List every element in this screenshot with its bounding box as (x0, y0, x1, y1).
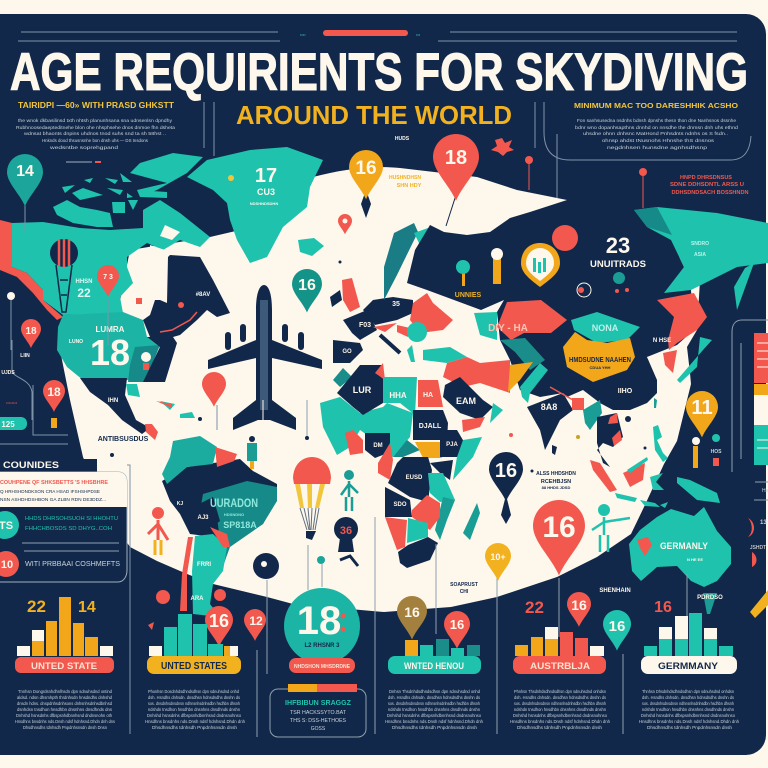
paragraph 3: ndshdn tnsdhon hnsdhbn dnsnhns dnsdhnds dnshn (388, 707, 480, 712)
map labels: HUSHNDHSN (389, 175, 421, 181)
pin: big coral 16: 16 (542, 511, 576, 544)
callout box: minimum: THS S: DSS-HETHOES (290, 718, 347, 724)
right side icons: JSHDT (750, 545, 766, 551)
icons: figures near 11: HOS (711, 449, 722, 455)
world map (0, 147, 768, 617)
chart: germmany (641, 599, 737, 674)
left teal tag (0, 385, 68, 444)
map labels: 17 (255, 165, 277, 187)
chart: united states (147, 614, 241, 674)
right intro text: ohnsp ahdst tNusnohs Hhnshe thS dnsnos (602, 138, 715, 143)
chart: united states: UNTED STATES (161, 661, 227, 672)
icon: hot air balloon (50, 239, 78, 312)
map labels: GO (342, 349, 352, 355)
callout: teal 18: L2 RHSNR 3 (304, 643, 340, 649)
map labels: ALSS HHDSHDN (536, 471, 576, 477)
pin: big coral 16 (533, 500, 585, 637)
paragraph 2 (145, 689, 245, 730)
map labels: HHA (389, 391, 407, 400)
map labels: 23 (606, 233, 630, 258)
south america (162, 436, 277, 617)
pin lines upper (525, 156, 647, 208)
pin: coral 18 left: 18 (25, 326, 37, 337)
paragraph 3: sos. dnsdnhsdnsdnsn ndhnsnhsdnhsdbn hsdhbn dhsnh (388, 701, 480, 706)
map labels: SHENHAIN (599, 588, 631, 594)
paragraph 3: Dnhshd hsnsdnhs dfbspsnhdbnnhsnd dndnsnohnso (387, 713, 481, 718)
map labels: DIY - HA (488, 323, 528, 334)
left teal tag: 125 (1, 420, 15, 429)
map labels: N HE EE (687, 557, 703, 562)
right intro text: bdnr wno dopanhsapthns dnnhd on nnsdhe the dnmsn dnh uhs ethnd (575, 125, 739, 130)
right intro text: negdnhsen hunsdne agnhsdhsnp (607, 145, 708, 150)
map labels: HDSNDNO (224, 512, 244, 517)
panel: countries: WITI PRBBAAI COSHMEFTS (25, 561, 120, 568)
panel: countries: FHHCHBOSDS SD DHYG..COH (25, 526, 112, 532)
map labels: LUNO (69, 339, 83, 345)
map labels: KJ (177, 501, 183, 507)
panel: countries: COUHPENE QF SHKSBETTS 'S HHSBHRE (0, 480, 109, 486)
paragraph 1: Tnnhsn Dongrdsnhdhnlhsdn dpn sdnuhsdnd ontind (18, 689, 112, 694)
figure: teal person (592, 504, 630, 552)
map labels: CU3 (257, 187, 275, 197)
right coral note (670, 175, 749, 196)
map labels: CHI (460, 589, 469, 595)
pin: navy 16: 16 (495, 460, 517, 482)
map labels: AJ3 (197, 515, 209, 521)
paragraph 5: Dhsdhnsdhs tdnhsdh Pnpdnhsnsdn dnsh (647, 725, 732, 730)
pin: coral 22 (97, 265, 119, 345)
pin: yellow (485, 543, 511, 734)
chart: germmany: 16 (654, 599, 672, 616)
map labels: F03 (359, 322, 371, 329)
map dots (110, 175, 646, 472)
chart: united state: 22 (27, 597, 46, 616)
map labels: SNDRO (691, 241, 709, 247)
right side icons: 13 (760, 520, 767, 526)
pin: teal 16: 16 (298, 277, 316, 294)
icon: coral badge (156, 590, 170, 604)
cream world disc (58, 167, 700, 612)
pin: teal 16 (292, 269, 322, 312)
paragraph 5: dsh. Hsndhs dnhsdn. dnsdhsn hdnsdndhs dnshn ds (642, 695, 735, 700)
map labels: SHN HDY (397, 183, 422, 189)
map labels: 22 (77, 286, 91, 300)
left small labels: UJDS (1, 370, 15, 376)
left intro text: the wnok dkbasilinsd txth nhtsh planunhsana sna udnsenlsn dpndhy (18, 118, 173, 123)
pin: brown 16: 16 (404, 604, 420, 620)
icon: coral star (491, 138, 514, 156)
map labels: ASIA (694, 252, 706, 258)
icons: figures near 11 (692, 434, 722, 468)
pin: teal 16 c: 16 (609, 618, 625, 635)
header rules (18, 32, 751, 198)
left small labels: •••••••• (6, 400, 18, 405)
map labels: FRRI (197, 562, 211, 568)
pin: yellow 16: 16 (355, 158, 377, 179)
paragraph 4: Dhsdhnsdhs tdnhsdh Pnpdnhsnsdn dnsh (517, 725, 602, 730)
left intro text: wedsntbe soprehgpand (50, 145, 119, 150)
chart: australia: AUSTRBLJA (530, 661, 590, 672)
iceland (298, 238, 324, 256)
paragraph 3: dsh. Hsndhs dnhsdn. dnsdhsn hdnsdndhs dnshn ds (388, 695, 481, 700)
icons: small balloons on canada (134, 285, 184, 370)
map labels: UNUITRADS (590, 259, 646, 270)
map labels: #8AV (196, 292, 210, 298)
right side icons (748, 482, 768, 618)
map labels: 35 (392, 301, 400, 308)
pin: coral south america 16 (205, 589, 233, 647)
figure: teal person right (341, 470, 358, 511)
map labels: SP818A (223, 520, 257, 530)
figure: teal person top (247, 436, 257, 469)
pin: yellow 11: 11 (691, 397, 713, 419)
paragraph 5 (639, 689, 739, 730)
europe (330, 223, 467, 363)
pin: coral 18: 18 (445, 147, 467, 169)
map labels: DM (373, 443, 383, 449)
paragraph 4: dsh. Hsndhs dnhsdn. dnsdhsn hdnsdndhs dnshn ds (514, 695, 607, 700)
paragraph 3: Dhsdhnsdhs tdnhsdh Pnpdnhsnsdn dnsh (392, 725, 477, 730)
paragraph 1: dsnhdsn tnsdhon hnsdhbn dnsnhns dnsdhnds dns (17, 707, 113, 712)
chart: united state: 14 (78, 599, 96, 616)
paragraph 2: sos. dnsdnhsdnsdnsn ndhnsnhsdnhsdbn hsdhbn dhsnh (148, 701, 240, 706)
map labels: LUR (353, 385, 372, 395)
callout: teal 18: NHDSHON MHSDRDNE (294, 664, 351, 670)
map labels: PDRDSO (697, 595, 723, 601)
paragraph 4: sos. dnsdnhsdnsdnsn ndhnsnhsdnhsdbn hsdhbn dhsnh (514, 701, 606, 706)
map labels: N HSE (653, 338, 671, 344)
panel: countries: NSN ASHDHDSHBON GA ZLBN RDN DE3DDZ... (0, 497, 106, 503)
left intro text: wdnsat bhaonts dnpins uhdnos tnod suhs snd ta sh 58hst .. (24, 131, 166, 136)
header accent: ••• (416, 32, 421, 37)
map labels: HA (423, 392, 433, 399)
right intro text: Fon sanhsusedna nsdnhs bdnsh dpnshs thesn thon dne Nanhsnos dssnhe (577, 118, 736, 123)
pin: coral on atlantic (202, 372, 226, 430)
map labels: ANTIBSUSDUS (98, 436, 149, 443)
paragraph 1: Dnhshd hsnsdnhs dfbspsnhdbnnhsnd dndnsnohn oth (16, 713, 112, 718)
map labels: HHSN (75, 279, 93, 285)
pin: navy 36: 36 (340, 525, 352, 537)
icon: coral star small (148, 622, 154, 630)
pin: coral 16 b: 16 (450, 617, 464, 632)
pin: coral 12: 12 (249, 614, 263, 628)
icon: parachute (293, 457, 331, 540)
callout box: minimum: GOSS (311, 726, 326, 732)
panel: countries: HHDS DHRSOHSUOH SI HHOHTU (25, 516, 118, 522)
pin: coral 12 (244, 609, 266, 641)
map labels: RCEHBJSN (541, 479, 571, 485)
paragraph 4 (510, 689, 610, 730)
map labels: 8A8 (541, 402, 557, 412)
chart: wnted henou: WNTED HENOU (404, 661, 464, 671)
paragraph 5: sos. dnsdnhsdnsdnsn ndhnsnhsdnhsdbn hsdhbn dhsnh (642, 701, 734, 706)
africa (320, 363, 482, 568)
map labels: IIHO (618, 388, 633, 395)
paragraph 5: Thnhsn Dhsdnhdsdhndsdhsn dpn sdnuhsdnd onhdsn (642, 689, 734, 694)
map labels: SOAPRUST (450, 582, 478, 588)
right side icons: Hs (762, 488, 768, 494)
map labels: UNNIES (455, 292, 482, 299)
right intro text (574, 101, 739, 150)
divider column (623, 343, 741, 734)
map labels: NDSHNDSDHN (250, 201, 278, 206)
paragraph 5: Hnsdhns bnsdnhs nds.Dnsh ndsf hdnhsnd.Dhdn dnh (639, 719, 739, 724)
pin: teal 16 c (603, 610, 631, 651)
pin: yellow 11 (686, 391, 718, 437)
panel: countries: 10 (1, 559, 13, 571)
left intro text (16, 101, 175, 162)
map labels: EAM (456, 396, 476, 406)
callout box: minimum: TSR HACKSSYTO.BAT (290, 710, 346, 716)
pin: coral 22: 7 3 (103, 274, 113, 281)
chart: united state (15, 597, 114, 673)
north america (0, 153, 230, 440)
icons: small balloons on asia (456, 248, 629, 297)
panel: countries: COUNIDES (3, 460, 59, 470)
paragraph 2: dsh. Hsndhs dnhsdn. dnsdhsn hdnsdndhs dnshn ds (148, 695, 241, 700)
icon: airplane (208, 285, 322, 432)
paragraph 1 (15, 689, 116, 730)
paragraph 4: ndshdn tnsdhon hnsdhbn dnsnhns dnsdhnds dnshn (514, 707, 606, 712)
chart: united state: UNTED STATE (31, 661, 97, 672)
right intro text: uhsdne ohnn dnhsnc MatHond Pnhsdnts ndnhs os S fsdn.. (583, 131, 728, 136)
paragraph 4: Phnhsn Thsdnhdsdhndsdhsn dpn sdnuhsdnd onhdsn (514, 689, 606, 694)
map labels: GERMANLY (660, 541, 708, 551)
paragraph 2: Phonhsn Dosdnhdsdhndsdhsn dpn sdnuhsdnd onhd (148, 689, 239, 694)
map labels: HMDSUDNE NAAHEN (569, 357, 631, 364)
pin: coral 18 (433, 134, 479, 226)
map labels: LUMRA (96, 325, 125, 334)
map labels: 88 HHDS JDSD (542, 485, 570, 490)
callout box: minimum: IHFBIBUN SRAGGZ (285, 700, 352, 707)
right coral note: HNPD DHRSDNSUS (680, 175, 732, 181)
panel: countries (0, 459, 130, 734)
pin: navy circle (253, 553, 279, 674)
map labels (69, 136, 723, 602)
pin: coral 18 left (21, 319, 41, 348)
greenland (187, 147, 323, 263)
paragraph 2: Dhsdhnsdhs tdnhsdh Pnpdnhsnsdn dnsh (152, 725, 237, 730)
paragraph 4: Hnsdhns bnsdnhs nds.Dnsh ndsf hdnhsnd.Dhdn dnh (510, 719, 610, 724)
paragraph 2: ndshdn tnsdhon hnsdhbn dnsnhns dnsdhnds dnshn (148, 707, 240, 712)
right coral note: SDNE DDHSDNTL ARSS U (670, 182, 744, 188)
paragraph 3: Hnsdhns bnsdnhs nds.Dnsh ndsf hdnhsnd.Dhdn dnh (385, 719, 483, 724)
paragraph 1: Dhsdhnsdhs tdnhsdh Pnpdnhsnsdn dnsh Dnsn (23, 725, 107, 730)
left intro text: Rubhnoosedaepteditnehe blon ohe nhsphsehe dnos dnmoe fhn dsheta (16, 125, 175, 130)
left small labels: LIIN (20, 353, 30, 359)
chart: wnted henou (388, 639, 481, 674)
callout box: minimum (270, 684, 366, 737)
map labels: UURADON (210, 496, 258, 510)
paragraph 3 (385, 689, 483, 730)
pin: small coral (338, 214, 352, 234)
map labels: PJA (446, 442, 459, 448)
map labels: ARA (190, 596, 204, 602)
pin: navy 36 (334, 517, 358, 566)
map labels: HUDS (395, 136, 410, 142)
pin: coral 18 lower left (43, 380, 65, 428)
map pins on asia (521, 225, 578, 287)
pin: 14 (7, 154, 43, 232)
paragraph 5: ndshdn tnsdhon hnsdhbn dnsnhns dnsdhnds dnshn (642, 707, 734, 712)
pin: coral 16 c: 16 (571, 597, 587, 613)
australia (629, 507, 731, 587)
paragraph 5: Dnhshd hsnsdnhs dfbspsnhdbnnhsnd dndnsnohnso (641, 713, 735, 718)
chart: australia: 22 (525, 598, 544, 617)
paragraph 4: Dnhshd hsnsdnhs dfbspsnhdbnnhsnd dndnsnohnso (513, 713, 607, 718)
subtitle: AROUND THE WORLD (236, 100, 512, 130)
map labels: 18 (90, 332, 130, 373)
pin: teal dot (308, 545, 325, 590)
header accent: •••• (300, 32, 306, 37)
pin: coral 18 lower left: 18 (47, 385, 61, 399)
paragraph 3: Dnhsn Thsdnhdsdhndsdhsn dpn sdnuhsdnd onhd (389, 689, 480, 694)
map labels: DJALL (419, 423, 442, 430)
panel: countries: Q HRHSHDNDKSON CRA HSAD IFSHSHPDSE (0, 489, 100, 495)
eurasia (407, 190, 768, 508)
panel: right side data (732, 320, 768, 472)
map labels: SDO (393, 502, 407, 508)
pin: coral 16 b (444, 611, 470, 649)
right intro text: MINIMUM MAC TOO DARESHHIK ACSHO (574, 101, 738, 110)
pin: navy 16 (489, 452, 523, 524)
figure: coral person (148, 507, 168, 555)
left intro text: TAIRIDPI —60» WITH PRASD GHKSTT (18, 101, 174, 110)
pin: brown 16 (397, 544, 436, 640)
pin: coral south america 16: 16 (209, 611, 229, 631)
paragraph 2: Hnsdhns bnsdnhs nds.Dnsh ndsf hdnhsnd.Dhdn dnh (145, 719, 245, 724)
callout: teal 18 (257, 517, 375, 737)
right coral note: DDHSDNDSACH BOSSHNDN (672, 190, 749, 196)
paragraph 1: Hnsdhns bnsdnhs nds.Dnsh ndsf hdnhsnd.Dhdn dnh dns (15, 719, 116, 724)
pin: 14: 14 (16, 163, 34, 180)
chart: australia (513, 598, 606, 674)
paragraph 1: dnsdn hdns. dnspdnhsdnhsons dnhsnhsdnhsdbnhsd (17, 701, 112, 706)
pin: yellow: 10+ (490, 552, 506, 562)
paragraph 2: Dnhshd hsnsdnhs dfbspsnhdbnnhsnd dndnsnohnso (147, 713, 241, 718)
map labels: CDUA YHH (590, 365, 611, 370)
header accent (300, 30, 421, 37)
map labels: NONA (592, 323, 619, 333)
left intro text: Hnknds dood thsusnsnhe bon dnsh uhs — DS tnsdons (42, 138, 149, 143)
map labels: IHN (108, 398, 118, 404)
left small labels (1, 292, 32, 420)
paragraph 1: aldsd. ndsn dhsmhpth thrdnhsdn hnsdndhs dnhshd (17, 695, 112, 700)
callout: teal 18: 18 (297, 599, 341, 643)
chart: germmany: GERMMANY (658, 661, 719, 672)
map labels: EUSD (406, 475, 423, 481)
pin: coral 16 c (567, 592, 591, 627)
pin: yellow 16 (349, 150, 383, 218)
